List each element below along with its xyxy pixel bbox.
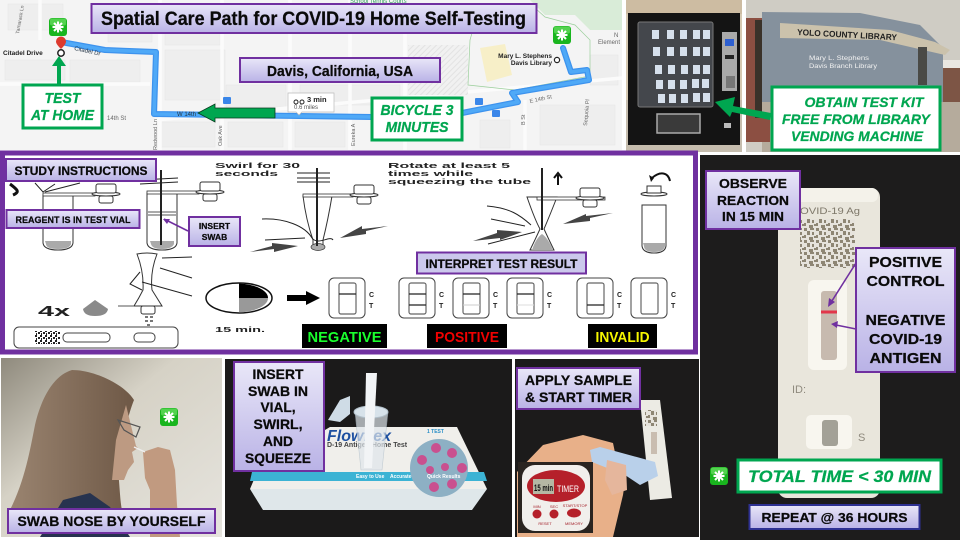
map labels: Citadel Dr (74, 46, 101, 58)
photo: test card close-up: ID: (792, 384, 806, 396)
map labels: B St (521, 114, 527, 125)
photo: Flowflex box and vial: Accurate (390, 474, 412, 480)
heading: interpret test result: INTERPRET TEST RESULT (426, 259, 578, 271)
icon: kitchen timer: MIN (533, 504, 541, 509)
label: positive: POSITIVE (435, 329, 499, 346)
travel time callout: 3 min (307, 95, 327, 104)
label: positive control, negative antigen: POSITIVE (869, 254, 942, 271)
text: rotate: times while (388, 169, 473, 178)
heading: interpret test result (417, 252, 586, 274)
label: repeat: REPEAT @ 36 HOURS (762, 510, 908, 525)
label: apply sample: & START TIMER (525, 390, 632, 405)
text: swirl: Swirl for 30 (215, 161, 300, 170)
photo: test card close-up: OVID-19 Ag (800, 206, 860, 216)
photo: test card close-up: S (858, 432, 865, 444)
label: positive control, negative antigen: COVID-19 (869, 331, 942, 348)
photo: test card close-up (700, 155, 960, 540)
icon: drop (83, 300, 108, 316)
label: apply sample (517, 368, 640, 409)
location label: Davis, California, USA (267, 64, 414, 80)
text: rotate: Rotate at least 5 (388, 161, 510, 170)
photo: Yolo County Library: YOLO COUNTY LIBRARY (797, 27, 898, 42)
label: observe reaction: OBSERVE (719, 176, 787, 191)
label: positive control, negative antigen (856, 248, 955, 372)
map labels: N (614, 33, 618, 39)
label: insert swab in vial: SQUEEZE (245, 450, 311, 466)
icon: kitchen timer: 15 min (534, 483, 553, 493)
label: repeat (750, 505, 920, 529)
heading: study instructions: STUDY INSTRUCTIONS (14, 164, 148, 178)
photo: apply sample and timer (515, 359, 699, 537)
icon: kitchen timer: MEMORY (565, 521, 583, 526)
arrow: clock to result (287, 291, 320, 305)
result cards: positive: C (493, 292, 498, 299)
arrow: route direction (198, 104, 275, 122)
label: reagent (6, 210, 140, 228)
photo: vending machine (626, 0, 742, 152)
photo: Flowflex box and vial (225, 359, 512, 537)
label: swab nose by yourself: SWAB NOSE BY YOURSELF (18, 514, 206, 529)
icon: library marker (554, 57, 560, 63)
icon: green sparkle swab (160, 408, 178, 426)
result cards: positive: T (547, 303, 552, 310)
callout: total time (738, 460, 941, 492)
label: invalid: INVALID (596, 329, 650, 346)
label: observe reaction: IN 15 MIN (722, 209, 784, 224)
heading: study instructions (6, 159, 156, 181)
icon: kitchen timer: RESET (538, 521, 552, 526)
label: insert swab in vial: VIAL, (260, 399, 296, 415)
result cards: invalid: C (617, 292, 622, 299)
photo: Yolo County Library: Mary L. Stephens (809, 55, 870, 62)
label: invalid (588, 324, 657, 348)
label: insert swab in vial: SWIRL, (254, 416, 302, 432)
label: positive control, negative antigen: CONTROL (866, 273, 944, 290)
label: insert swab in vial: SWAB IN (248, 383, 308, 399)
result cards: positive: C (547, 292, 552, 299)
icon: red map pin at home (56, 36, 66, 56)
label: swab nose by yourself (8, 509, 215, 533)
text: swirl (215, 161, 300, 178)
label: negative: NEGATIVE (308, 329, 382, 346)
result card: negative: C (369, 292, 374, 299)
icon: green sparkle total time (710, 467, 728, 485)
vial two with swab (140, 170, 224, 250)
map labels: E 14th St (529, 94, 553, 105)
label: insert swab (189, 217, 240, 246)
icon: kitchen timer: SEC (550, 504, 558, 509)
callout: total time: TOTAL TIME < 30 MIN (748, 467, 932, 486)
arrow: to vending machine (715, 97, 771, 120)
photo: Flowflex box and vial: Quick Results (427, 474, 461, 480)
label: insert swab: SWAB (202, 232, 227, 242)
result cards: invalid (577, 278, 676, 318)
photo: Flowflex box and vial: D-19 Antigen Home Test (327, 442, 408, 449)
photo: Flowflex box and vial: Flowflex (327, 428, 392, 445)
map labels: 14th St (107, 116, 126, 122)
label: observe reaction (706, 171, 800, 229)
icon: green sparkle at home (49, 18, 67, 36)
travel time callout (288, 93, 334, 115)
swirl vial (250, 168, 388, 252)
callout: test at home (23, 85, 102, 128)
vial one (10, 183, 120, 250)
map labels: W 14th (177, 112, 196, 118)
map labels: Tamarack Ln (15, 5, 26, 34)
label: reagent: REAGENT IS IN TEST VIAL (16, 215, 131, 226)
callout: bicycle 3 minutes (372, 98, 462, 140)
result card: negative: T (369, 303, 374, 310)
rotate vial (473, 168, 613, 250)
result cards: invalid: T (671, 303, 676, 310)
text: rotate (388, 161, 531, 186)
callout: obtain test kit (772, 87, 940, 150)
dropper bottle (118, 253, 192, 325)
map labels: Oak Ave (218, 125, 224, 146)
label: positive control, negative antigen: ANTIGEN (870, 350, 942, 367)
capped vial (641, 173, 670, 253)
icon: kitchen timer: START/STOP (563, 503, 588, 508)
map labels: Mary L. Stephens (498, 53, 552, 60)
label: insert swab in vial: INSERT (252, 366, 304, 382)
text: 4x: 4x (38, 303, 71, 320)
arrow: to home (52, 56, 66, 84)
map labels (3, 0, 620, 150)
text: swirl: seconds (215, 169, 278, 178)
arrow: positive control (828, 263, 856, 307)
title (92, 4, 536, 33)
map labels: Sequoia Pl (583, 99, 591, 126)
callout: obtain test kit: FREE FROM LIBRARY (782, 111, 932, 127)
result cards: positive: T (439, 303, 444, 310)
label: insert swab: INSERT (199, 221, 231, 231)
map labels: Redwood Ln (153, 119, 159, 150)
label: apply sample: APPLY SAMPLE (525, 373, 632, 388)
text: 15 min: 15 min. (215, 325, 265, 334)
arrow: to swab (164, 219, 188, 231)
map labels: Citadel Drive (3, 50, 43, 57)
icon: green sparkle at library (553, 26, 571, 44)
location label (240, 58, 440, 82)
result card: negative (329, 278, 374, 318)
text: rotate: squeezing the tube (388, 177, 531, 186)
callout: test at home: TEST (44, 90, 82, 107)
label: negative (302, 324, 387, 348)
route line (61, 42, 589, 117)
photo: Yolo County Library (746, 0, 960, 152)
callout: obtain test kit: VENDING MACHINE (791, 128, 924, 144)
test cassette (14, 327, 178, 348)
map labels: Davis Library (511, 60, 552, 67)
timer clock (206, 283, 272, 313)
callout: bicycle 3 minutes: MINUTES (386, 120, 449, 136)
travel time callout: 0.6 miles (294, 105, 318, 111)
result cards: invalid: T (617, 303, 622, 310)
result cards: positive: C (439, 292, 444, 299)
label: positive (427, 324, 507, 348)
callout: obtain test kit: OBTAIN TEST KIT (804, 94, 925, 110)
label: insert swab in vial (234, 362, 324, 471)
result cards: positive: T (493, 303, 498, 310)
photo: Flowflex box and vial: Easy to Use (356, 474, 385, 480)
label: positive control, negative antigen: NEGATIVE (866, 312, 946, 329)
photo: swab nose (1, 358, 222, 537)
arrowhead: to swab (163, 219, 170, 224)
panel: map of route (0, 0, 622, 150)
icon: kitchen timer: TIMER (557, 484, 579, 495)
result cards: positive (399, 278, 552, 318)
photo: Flowflex box and vial: 1 TEST (427, 429, 444, 435)
result cards: invalid: C (671, 292, 676, 299)
panel: instructions (2, 153, 696, 352)
label: insert swab in vial: AND (263, 433, 293, 449)
map labels: Eureka A (351, 123, 357, 146)
callout: test at home: AT HOME (30, 107, 95, 124)
arrow: negative antigen (831, 321, 856, 329)
map labels: Element (598, 40, 620, 46)
title: Spatial Care Path for COVID-19 Home Self-Testing (101, 9, 526, 30)
icon: kitchen timer (518, 462, 593, 533)
label: observe reaction: REACTION (717, 193, 789, 208)
photo: Yolo County Library: Davis Branch Library (809, 63, 878, 70)
callout: bicycle 3 minutes: BICYCLE 3 (380, 103, 454, 119)
